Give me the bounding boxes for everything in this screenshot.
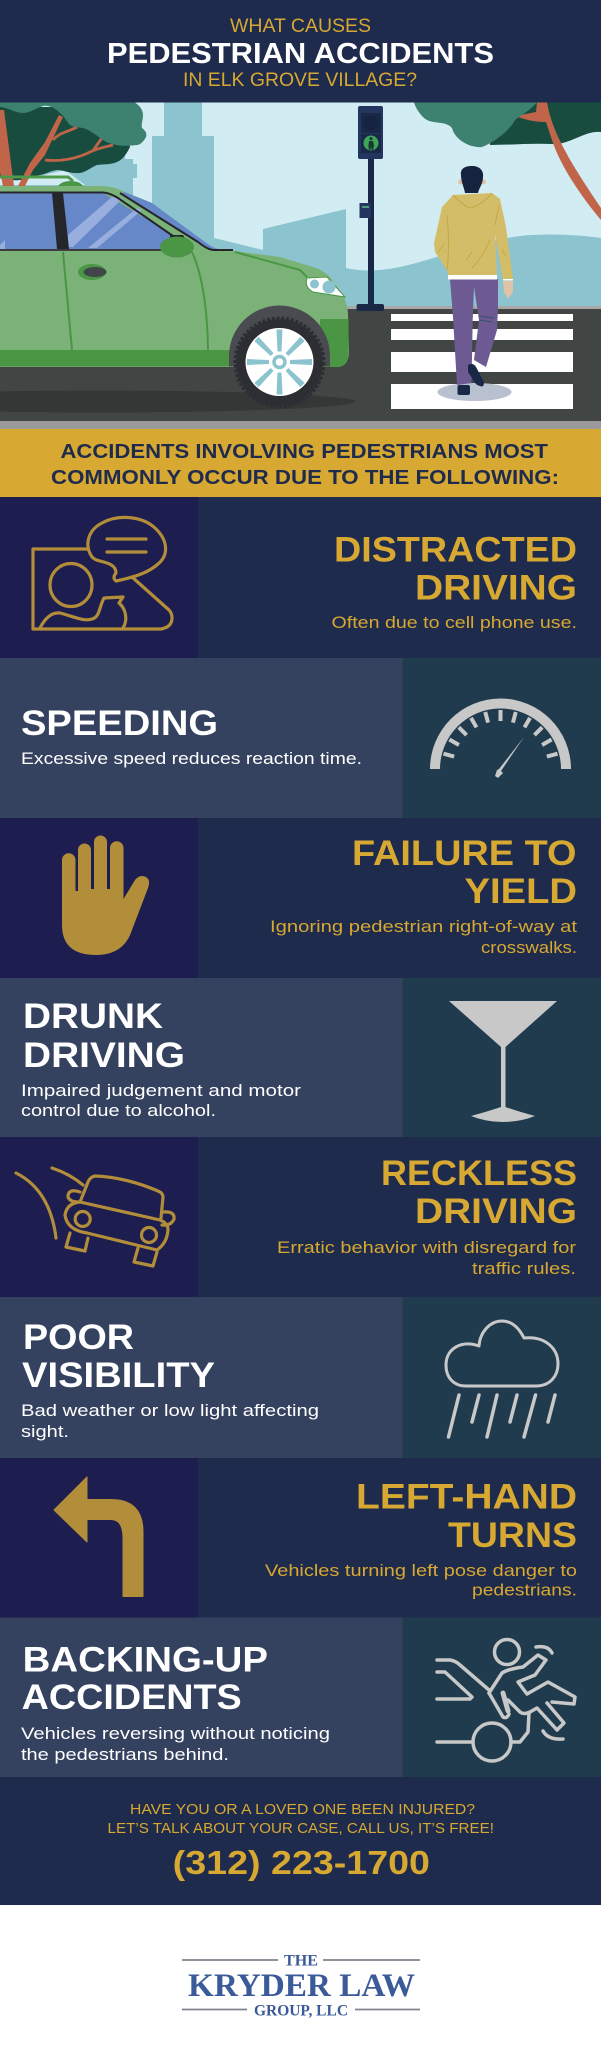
panel: left-hand turns <box>0 1458 601 1618</box>
panel: failure to yield <box>0 818 601 978</box>
panel: reckless driving <box>0 1137 601 1297</box>
icon: raised hand <box>62 836 149 955</box>
heading <box>334 530 577 607</box>
heading: DRIVING <box>23 1035 185 1075</box>
description: Vehicles reversing without noticing <box>21 1724 330 1743</box>
heading: VISIBILITY <box>22 1355 215 1395</box>
illustration: street scene with car and pedestrian <box>0 102 601 429</box>
description: Vehicles turning left pose danger to <box>265 1561 577 1580</box>
right tree <box>414 102 601 220</box>
description <box>21 1724 330 1764</box>
heading: POOR <box>23 1317 134 1357</box>
icon: rain cloud <box>446 1321 558 1437</box>
description: pedestrians. <box>472 1580 577 1600</box>
heading: RECKLESS <box>381 1153 577 1193</box>
description <box>265 1561 577 1600</box>
heading: ACCIDENTS <box>22 1677 242 1717</box>
icon: swerving car <box>16 1168 174 1266</box>
description: Ignoring pedestrian right-of-way at <box>270 917 577 936</box>
panel: poor visibility <box>0 1297 601 1458</box>
banner: intro statement: COMMONLY OCCUR DUE TO THE FOLLOWING: <box>51 466 559 489</box>
logo: The Kryder Law Group: GROUP, LLC <box>254 2003 348 2020</box>
header: title: WHAT CAUSES <box>230 16 371 37</box>
heading: DISTRACTED <box>334 530 577 570</box>
crosswalk <box>391 314 573 409</box>
heading <box>381 1153 577 1231</box>
description: Erratic behavior with disregard for <box>277 1238 576 1257</box>
heading <box>22 1317 215 1395</box>
description <box>277 1238 576 1278</box>
panel: drunk driving <box>0 978 601 1137</box>
header: title <box>0 0 601 102</box>
heading: BACKING-UP <box>23 1640 268 1680</box>
heading: DRUNK <box>23 996 163 1036</box>
traffic light <box>356 106 384 311</box>
heading: LEFT-HAND <box>356 1476 577 1516</box>
heading <box>352 833 577 911</box>
icon: pedestrian hit by car <box>437 1640 575 1761</box>
icon: speedometer <box>430 698 571 778</box>
heading: SPEEDING <box>21 703 218 743</box>
description: Impaired judgement and motor <box>21 1081 301 1100</box>
icon: left turn arrow <box>54 1477 143 1596</box>
description <box>270 917 577 957</box>
pedestrian <box>434 166 513 401</box>
panel: speeding <box>0 658 601 818</box>
icon: martini glass <box>449 1001 557 1122</box>
panel: distracted driving <box>0 497 601 658</box>
description <box>21 1081 301 1120</box>
logo: The Kryder Law Group: KRYDER LAW <box>188 1968 415 2004</box>
panel: backing-up accidents <box>0 1618 601 1777</box>
heading: FAILURE TO <box>352 833 576 873</box>
heading: DRIVING <box>415 567 577 607</box>
heading <box>22 1640 268 1717</box>
heading <box>356 1476 577 1555</box>
description: traffic rules. <box>472 1259 576 1278</box>
phone number: (312) 223-1700 <box>173 1845 430 1882</box>
left tree <box>0 102 146 186</box>
banner: intro statement: ACCIDENTS INVOLVING PEDESTRIANS MOST <box>60 440 549 463</box>
icon: driver on phone <box>33 517 172 629</box>
heading <box>23 996 185 1075</box>
footer: call to action: LET’S TALK ABOUT YOUR CASE, CALL US, IT’S FREE! <box>108 1820 494 1837</box>
car <box>0 177 349 407</box>
description: Bad weather or low light affecting <box>21 1401 319 1420</box>
description: control due to alcohol. <box>21 1101 216 1120</box>
footer: call to action <box>0 1777 601 1905</box>
header: title: IN ELK GROVE VILLAGE? <box>183 70 417 91</box>
heading: DRIVING <box>415 1191 577 1231</box>
logo: The Kryder Law Group <box>182 1952 420 2020</box>
header: title: PEDESTRIAN ACCIDENTS <box>107 38 494 70</box>
description: crosswalks. <box>481 938 577 957</box>
heading: YIELD <box>464 871 577 911</box>
heading: TURNS <box>448 1515 577 1555</box>
footer: call to action: HAVE YOU OR A LOVED ONE BEEN INJURED? <box>130 1801 475 1818</box>
car shadow <box>0 390 355 412</box>
description <box>21 1401 319 1441</box>
description: Often due to cell phone use. <box>332 613 577 632</box>
banner: intro statement <box>0 429 601 497</box>
description: sight. <box>21 1422 69 1441</box>
description: Excessive speed reduces reaction time. <box>21 749 362 768</box>
description: the pedestrians behind. <box>21 1745 229 1764</box>
logo: The Kryder Law Group: THE <box>284 1952 318 1969</box>
